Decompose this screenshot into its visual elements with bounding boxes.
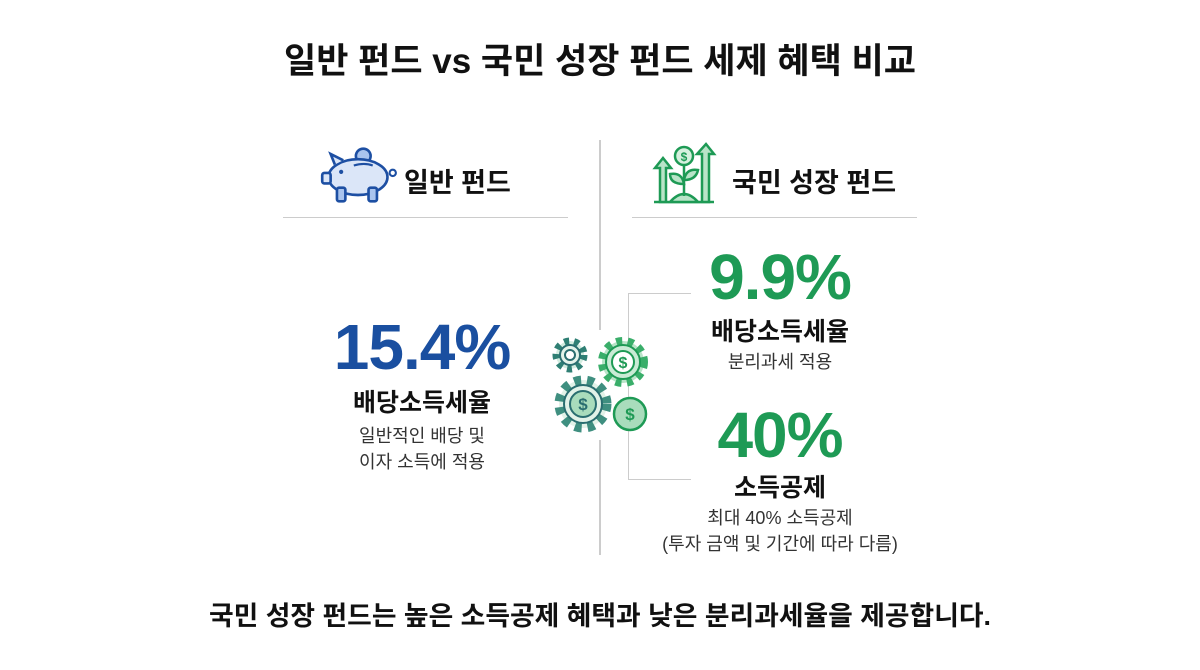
description xyxy=(359,426,485,472)
description: (투자 금액 및 기간에 따라 다름) xyxy=(662,534,898,554)
icon: gears: $ xyxy=(619,355,628,372)
footer summary: 국민 성장 펀드는 높은 소득공제 혜택과 낮은 분리과세율을 제공합니다. xyxy=(209,601,991,631)
header: national growth fund xyxy=(652,142,896,204)
description: 분리과세 적용 xyxy=(728,352,832,372)
icon: gears: $ xyxy=(625,405,635,424)
big number: 15.4% xyxy=(334,311,510,383)
bracket connector xyxy=(628,293,691,480)
label: 배당소득세율 xyxy=(711,318,849,346)
panel: growth fund stat 2 xyxy=(662,399,898,554)
description: 이자 소득에 적용 xyxy=(359,452,485,472)
icon: gears: $ xyxy=(578,395,588,414)
header: general fund xyxy=(320,147,511,203)
panel: general fund stat xyxy=(334,311,510,472)
description: 일반적인 배당 및 xyxy=(359,426,485,446)
heading: 일반 펀드 xyxy=(404,168,511,198)
description xyxy=(662,508,898,554)
heading: 국민 성장 펀드 xyxy=(732,168,896,198)
label: 배당소득세율 xyxy=(353,389,491,417)
description: 최대 40% 소득공제 xyxy=(707,508,853,528)
icon: plant growth xyxy=(652,142,716,204)
big number: 9.9% xyxy=(709,241,851,313)
big number: 40% xyxy=(717,399,843,471)
title: 일반 펀드 vs 국민 성장 펀드 세제 혜택 비교 xyxy=(284,42,916,81)
panel: growth fund stat 1 xyxy=(709,241,851,372)
icon: plant growth: $ xyxy=(681,150,688,164)
label: 소득공제 xyxy=(734,474,826,502)
icon: piggy bank xyxy=(320,147,397,203)
dividers xyxy=(283,217,568,218)
icon: gears xyxy=(552,337,648,432)
